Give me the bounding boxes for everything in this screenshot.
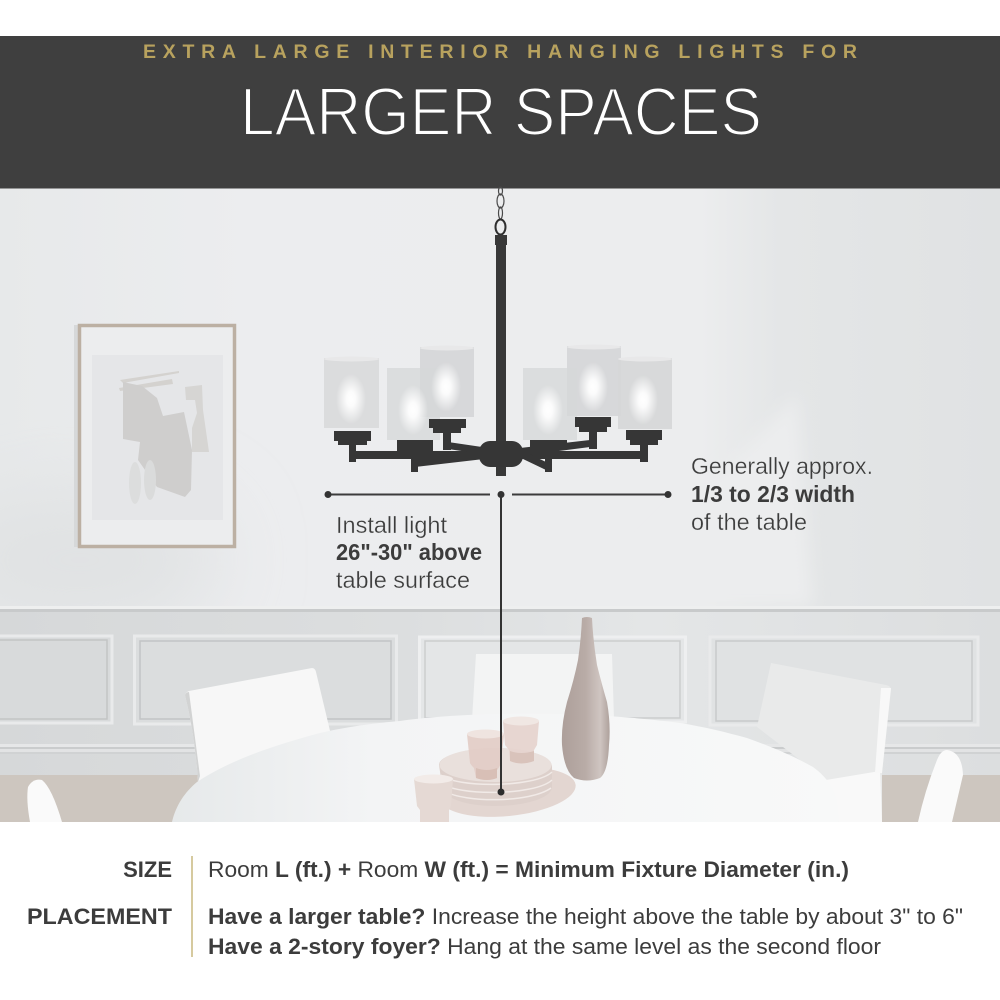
callout: height: 26"-30" above (336, 539, 482, 565)
floor (0, 775, 1000, 822)
candle cups (334, 417, 662, 472)
plate stack (439, 748, 552, 784)
placement tip two: Have a 2-story foyer? Hang at the same level as the second floor (208, 934, 881, 959)
ring (496, 220, 506, 234)
chair: near left (27, 780, 62, 822)
header band (0, 36, 1000, 188)
chandelier (324, 187, 672, 476)
callout: height: table surface (336, 567, 470, 593)
callout: height (336, 512, 482, 593)
chain (497, 187, 504, 219)
framed artwork (74, 325, 234, 547)
callout: width: of the table (691, 509, 807, 535)
header title: LARGER SPACES (240, 74, 762, 150)
width dimension line (324, 491, 672, 498)
callout: width (691, 453, 873, 535)
header kicker: EXTRA LARGE INTERIOR HANGING LIGHTS FOR (143, 41, 857, 63)
placement tip one: Have a larger table? Increase the height above the table by about 3" to 6" (208, 904, 963, 929)
large plate (450, 770, 576, 817)
size label: SIZE (123, 857, 172, 882)
wainscoting (0, 606, 1000, 777)
callout: height: Install light (336, 512, 448, 538)
glass shades (324, 344, 672, 440)
arms and hub (355, 440, 646, 470)
callout: width: 1/3 to 2/3 width (691, 481, 855, 507)
callout: width: Generally approx. (691, 453, 873, 479)
height dimension line (498, 494, 504, 796)
footer divider (191, 856, 193, 957)
glass 2 (503, 716, 539, 764)
room photo background (0, 188, 1000, 823)
chair: left (185, 668, 331, 782)
vase (562, 617, 610, 780)
round table (172, 714, 839, 822)
size formula: Room L (ft.) + Room W (ft.) = Minimum Fixture Diameter (in.) (208, 857, 849, 882)
placement label: PLACEMENT (27, 904, 173, 929)
chair: near right (918, 750, 963, 822)
glass 3 (414, 774, 453, 822)
stem (495, 235, 507, 476)
glass 1 (467, 730, 504, 780)
chair: back centre (472, 654, 614, 720)
chair: right (757, 663, 891, 822)
footer guidance (27, 856, 963, 959)
